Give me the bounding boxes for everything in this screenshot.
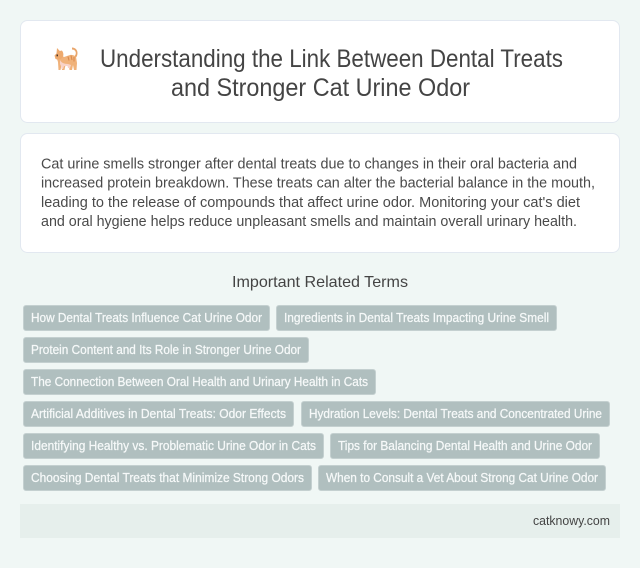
tag: balancing tips bbox=[330, 434, 600, 458]
tag: hydration levels bbox=[302, 402, 610, 426]
tag: dental treats influence: How Dental Treats Influence Cat Urine Odor bbox=[31, 311, 262, 325]
tag: consult a vet bbox=[318, 466, 606, 490]
footer bbox=[20, 504, 620, 538]
tag: artificial additives bbox=[24, 402, 294, 426]
text block: description bbox=[41, 156, 595, 230]
text block: description: Cat urine smells stronger after dental treats due to changes in their oral bacteria and bbox=[41, 156, 577, 172]
text block: description: increased protein breakdown. These treats can alter the bacterial balance in the mouth, bbox=[41, 176, 595, 192]
tag: dental treats influence bbox=[24, 306, 270, 330]
tag: oral and urinary health bbox=[24, 370, 376, 394]
title: Understanding the Link Between Dental Treats bbox=[100, 45, 563, 73]
tag: artificial additives: Artificial Additives in Dental Treats: Odor Effects bbox=[31, 407, 286, 421]
panel: description bbox=[20, 134, 620, 252]
tag: healthy vs problematic: Identifying Healthy vs. Problematic Urine Odor in Cats bbox=[31, 439, 316, 453]
tag: protein content: Protein Content and Its Role in Stronger Urine Odor bbox=[31, 343, 301, 357]
icon: cat bbox=[54, 48, 78, 70]
tag: ingredients: Ingredients in Dental Treats Impacting Urine Smell bbox=[284, 311, 549, 325]
title: and Stronger Cat Urine Odor bbox=[171, 74, 470, 102]
tag list bbox=[24, 306, 610, 490]
tag: choosing treats: Choosing Dental Treats that Minimize Strong Odors bbox=[31, 471, 304, 485]
tag: protein content bbox=[24, 338, 308, 362]
title bbox=[100, 45, 563, 102]
tag: hydration levels: Hydration Levels: Dental Treats and Concentrated Urine bbox=[309, 407, 602, 421]
footer source: catknowy.com bbox=[533, 514, 610, 528]
text block: description: and oral hygiene helps reduce unpleasant smells and maintain overall urinary health. bbox=[41, 214, 577, 230]
tag: ingredients bbox=[276, 306, 556, 330]
tag: choosing treats bbox=[24, 466, 312, 490]
tag: healthy vs problematic bbox=[24, 434, 324, 458]
tag: oral and urinary health: The Connection Between Oral Health and Urinary Health in Cats bbox=[31, 375, 368, 389]
tag: consult a vet: When to Consult a Vet About Strong Cat Urine Odor bbox=[326, 471, 598, 485]
heading: related terms: Important Related Terms bbox=[232, 274, 408, 291]
tag: balancing tips: Tips for Balancing Dental Health and Urine Odor bbox=[338, 439, 592, 453]
panel: title card bbox=[20, 20, 620, 122]
text block: description: leading to the release of compounds that affect urine odor. Monitoring your cat's diet bbox=[41, 195, 580, 211]
